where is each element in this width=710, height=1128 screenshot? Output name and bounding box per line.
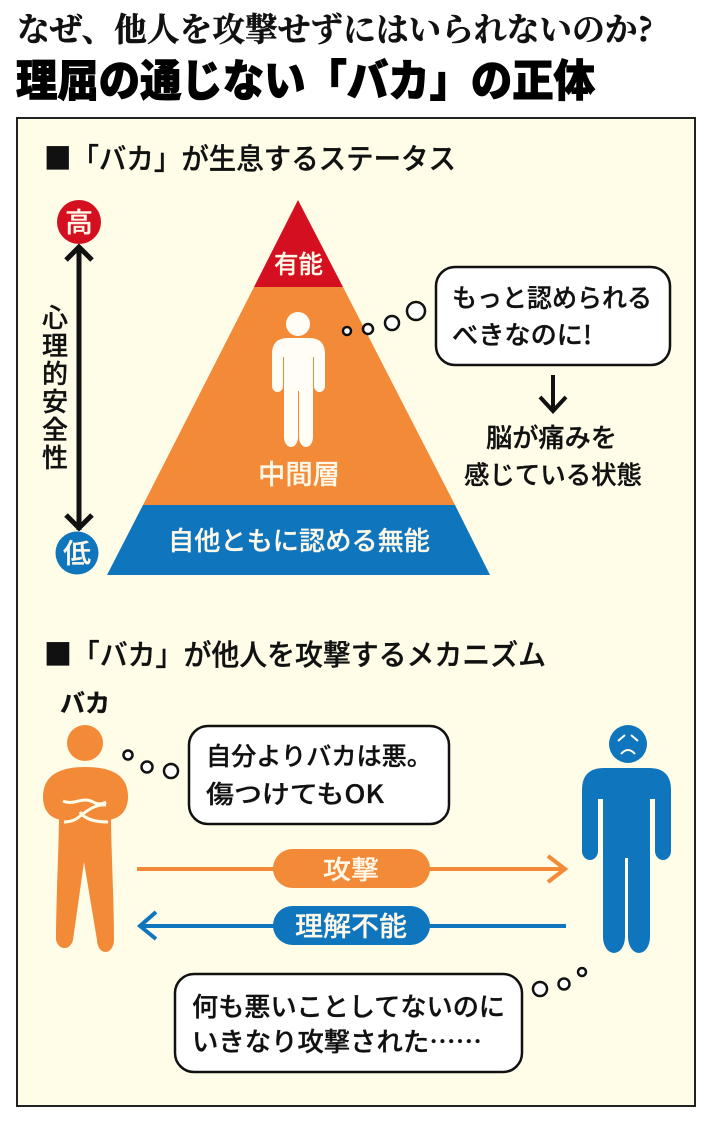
arrow: incomprehensible: 理解不能 — [295, 905, 407, 944]
axis: psychological safety — [42, 200, 101, 574]
axis: psychological safety: 的 — [42, 354, 68, 391]
thought bubble: should be recognized — [343, 267, 670, 365]
thought bubble: victim: いきなり攻撃された…… — [192, 1022, 482, 1059]
arrow: attack — [137, 849, 565, 888]
thought bubble: attacker — [124, 726, 449, 824]
title: subtitle line: なぜ、他人を攻撃せずにはいられないのか? — [17, 4, 653, 51]
title: main heading: 理屈の通じない「バカ」の正体 — [16, 45, 595, 109]
text: brain feels pain: 感じている状態 — [464, 455, 642, 492]
axis: psychological safety: 全 — [42, 410, 68, 447]
chart: status pyramid — [107, 200, 490, 575]
text: brain feels pain — [464, 418, 642, 492]
text: brain feels pain: 脳が痛みを — [486, 418, 617, 455]
axis: psychological safety: 高 — [65, 201, 93, 240]
axis: psychological safety: 心 — [42, 298, 68, 335]
arrow: incomprehensible — [140, 905, 566, 945]
thought bubble: attacker: 自分よりバカは悪。 — [206, 737, 432, 773]
arrow: down to brain pain — [540, 375, 566, 411]
arrow: attack: 攻撃 — [323, 850, 379, 887]
thought bubble: should be recognized: もっと認められる — [452, 278, 652, 315]
axis: psychological safety: 理 — [42, 326, 68, 363]
icon: white person in middle layer — [272, 312, 325, 447]
thought bubble: should be recognized: べきなのに! — [452, 315, 592, 352]
heading: status section: ■「バカ」が生息するステータス — [44, 136, 456, 178]
axis: psychological safety: 低 — [63, 532, 91, 571]
axis: psychological safety: 安 — [42, 382, 68, 419]
icon: orange person with crossed arms — [43, 725, 128, 952]
axis: psychological safety: 性 — [42, 438, 68, 475]
heading: mechanism section: ■「バカ」が他人を攻撃するメカニズム — [44, 632, 546, 674]
label: baka: バカ — [60, 684, 110, 720]
chart: status pyramid: 有能 — [274, 245, 323, 281]
thought bubble: victim — [175, 968, 586, 1072]
thought bubble: victim: 何も悪いことしてないのに — [192, 987, 505, 1024]
chart: status pyramid: 中間層 — [258, 453, 340, 492]
icon: sad blue person — [582, 725, 671, 953]
thought bubble: attacker: 傷つけてもOK — [206, 775, 384, 811]
chart: status pyramid: 自他ともに認める無能 — [168, 521, 430, 558]
